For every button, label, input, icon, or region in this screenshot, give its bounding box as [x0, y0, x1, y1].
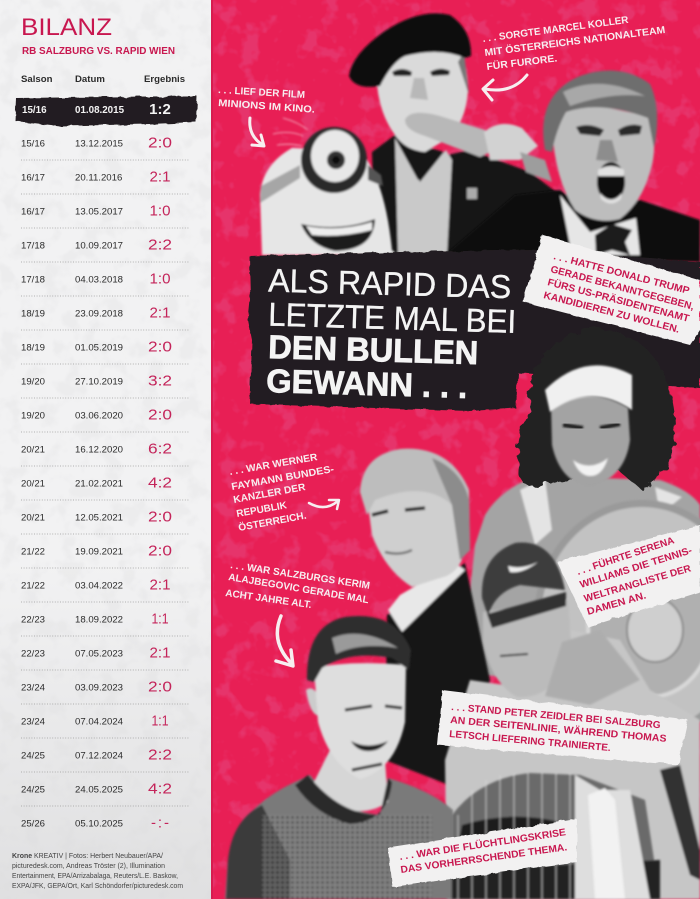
- table header: Datum: [75, 74, 105, 85]
- photo credits: picturedesk.com, Andreas Tröster (2), Illumination: [12, 863, 165, 870]
- table rows: 1:1: [152, 712, 168, 730]
- text: Faymann: REPUBLIK: [236, 500, 288, 520]
- table header: Ergebnis: [144, 74, 185, 85]
- callout: Zeidler: LETSCH LIEFERING TRAINIERTE.: [449, 729, 611, 754]
- table rows: 21.02.2021: [75, 478, 123, 490]
- table rows: 18.09.2022: [75, 614, 123, 626]
- text: Faymann: . . . WAR WERNER: [229, 452, 319, 478]
- callout: Trump: KANDIDIEREN ZU WOLLEN.: [542, 290, 681, 336]
- table rows: 16/17: [21, 206, 45, 218]
- text: Alajbegovic: ALAJBEGOVIC GERADE MAL: [228, 572, 369, 606]
- photo credits: [12, 853, 183, 890]
- table rows: 4:2: [148, 780, 172, 798]
- title: LETZTE MAL BEI: [268, 296, 517, 340]
- table rows: 2:1: [150, 304, 170, 322]
- table rows: 20/21: [21, 444, 45, 456]
- title: GEWANN . . .: [266, 362, 468, 405]
- table rows: 20/21: [21, 478, 45, 490]
- table rows: 2:0: [148, 542, 172, 560]
- text: Minions: MINIONS IM KINO.: [218, 98, 316, 116]
- table rows: 03.09.2023: [75, 682, 123, 694]
- dark band behind title: [248, 250, 700, 411]
- table rows: 19.09.2021: [75, 546, 123, 558]
- table rows: 1:0: [150, 270, 170, 288]
- table rows: 1:1: [152, 610, 168, 628]
- subheading: RB SALZBURG VS. RAPID WIEN: [22, 46, 175, 57]
- callout: Trump: [523, 235, 700, 345]
- table rows: 2:0: [148, 134, 172, 152]
- background: pink: [212, 0, 700, 899]
- table rows: 18/19: [21, 342, 45, 354]
- table rows: 17/18: [21, 274, 45, 286]
- table rows: 27.10.2019: [75, 376, 123, 388]
- highlighted row: [15, 96, 197, 126]
- callout: Zeidler: . . . STAND PETER ZEIDLER BEI SALZBURG: [451, 702, 661, 731]
- table rows: 24/25: [21, 784, 45, 796]
- table rows: 21/22: [21, 546, 45, 558]
- table rows: 20/21: [21, 512, 45, 524]
- table rows: 2:0: [148, 678, 172, 696]
- panel: bilanz table: [0, 0, 213, 899]
- table rows: 19/20: [21, 376, 45, 388]
- table rows: 1:0: [150, 202, 170, 220]
- table rows: 24.05.2025: [75, 784, 123, 796]
- callout: Serena: . . . FÜHRTE SERENA: [575, 533, 676, 578]
- table rows: 22/23: [21, 614, 45, 626]
- callout: Serena: DAMEN AN.: [586, 590, 648, 618]
- text: Faymann: KANZLER DER: [233, 482, 307, 506]
- text: Alajbegovic: [225, 560, 371, 611]
- callout: Zeidler: AN DER SEITENLINIE, WÄHREND THOMAS: [450, 713, 667, 745]
- table rows: 2:0: [148, 338, 172, 356]
- text: Faymann: [229, 452, 335, 534]
- photo: Werner Faymann: [360, 449, 490, 790]
- callout: Serena: [557, 525, 700, 627]
- table rows: 04.03.2018: [75, 274, 123, 286]
- table rows: 01.05.2019: [75, 342, 123, 354]
- table rows: 23/24: [21, 682, 46, 694]
- photo: Donald Trump: [445, 71, 700, 262]
- table rows: 2:1: [150, 168, 170, 186]
- table rows: 23/24: [21, 716, 46, 728]
- table rows: 23.09.2018: [75, 308, 123, 320]
- title: ALS RAPID DAS: [268, 262, 512, 305]
- text: Minions: . . . LIEF DER FILM: [218, 85, 305, 101]
- table rows: 03.04.2022: [75, 580, 123, 592]
- photo credits: Krone KREATIV | Fotos: Herbert Neubauer/APA/: [12, 853, 163, 860]
- table rows: 12.05.2021: [75, 512, 123, 524]
- photo credits: Entertainment, EPA/Arrizabalaga, Reuters/L.E. Baskow,: [12, 873, 178, 880]
- callout: Serena: WILLIAMS DIE TENNIS-: [579, 545, 694, 591]
- table rows: 19/20: [21, 410, 45, 422]
- table rows: 07.05.2023: [75, 648, 123, 660]
- table header: Salson: [21, 74, 53, 85]
- arrow: Koller: [483, 75, 527, 100]
- photo: Minion: [260, 118, 398, 255]
- photo: Peter Zeidler: [445, 543, 700, 899]
- text: Faymann: FAYMANN BUNDES-: [231, 464, 335, 493]
- table rows: 16.12.2020: [75, 444, 123, 456]
- text: Faymann: ÖSTERREICH.: [237, 509, 308, 534]
- photo: Marcel Koller: [349, 13, 565, 255]
- table rows: 3:2: [148, 372, 172, 390]
- photo: Kerim Alajbegovic: [225, 616, 453, 899]
- text: Alajbegovic: . . . WAR SALZBURGS KERIM: [230, 560, 371, 592]
- title: [266, 262, 517, 405]
- callout: Serena: WELTRANGLISTE DER: [583, 563, 693, 605]
- callout: Flüchtlingskrise: DAS VORHERRSCHENDE THEMA.: [400, 842, 568, 876]
- table rows: 07.12.2024: [75, 750, 124, 762]
- arrow: Alajbegovic: [276, 616, 293, 666]
- table rows: 17/18: [21, 240, 45, 252]
- text: Koller: [482, 15, 666, 73]
- text: Minions: [218, 85, 316, 116]
- table rows: 2:2: [148, 746, 172, 764]
- table rows: -:-: [151, 814, 169, 832]
- table rows: 18/19: [21, 308, 45, 320]
- callout: Zeidler: [437, 690, 688, 765]
- title: DEN BULLEN: [268, 328, 479, 371]
- table rows: 2:0: [148, 508, 172, 526]
- table rows: 21/22: [21, 580, 45, 592]
- text: Koller: MIT ÖSTERREICHS NATIONALTEAM: [484, 23, 666, 59]
- arrow: Minion: [250, 118, 264, 146]
- callout: Trump: FÜRS US-PRÄSIDENTENAMT: [546, 275, 691, 325]
- table rows: 03.06.2020: [75, 410, 123, 422]
- arrow: Faymann: [309, 500, 339, 509]
- table rows: 2:1: [150, 576, 170, 594]
- table rows: 20.11.2016: [75, 172, 122, 184]
- callout: Trump: GERADE BEKANNTGEGEBEN,: [549, 264, 695, 313]
- table rows: 2:0: [148, 406, 172, 424]
- table rows: 4:2: [148, 474, 172, 492]
- photo: Serena Williams: [452, 328, 700, 680]
- text: Koller: . . . SORGTE MARCEL KOLLER: [482, 15, 630, 45]
- text: Alajbegovic: ACHT JAHRE ALT.: [225, 588, 312, 611]
- table rows: 25/26: [21, 818, 45, 830]
- table rows: 16/17: [21, 172, 45, 184]
- table rows: 13.12.2015: [75, 138, 123, 150]
- table rows: 07.04.2024: [75, 716, 124, 728]
- callout: Trump: . . . HATTE DONALD TRUMP: [552, 251, 691, 297]
- table rows: 10.09.2017: [75, 240, 123, 252]
- highlighted row: 15/16: [22, 105, 47, 116]
- highlighted row: 1:2: [149, 101, 171, 118]
- table rows: 22/23: [21, 648, 45, 660]
- highlighted row: 01.08.2015: [75, 105, 125, 116]
- text: Koller: FÜR FURORE.: [486, 51, 558, 73]
- callout: Flüchtlingskrise: [388, 819, 577, 887]
- table rows: 6:2: [148, 440, 172, 458]
- table header: [21, 74, 185, 85]
- table rows: 15/16: [21, 138, 45, 150]
- table rows: 2:2: [148, 236, 172, 254]
- heading: Bilanz: BILANZ: [21, 14, 112, 41]
- table rows: 05.10.2025: [75, 818, 123, 830]
- table rows: [21, 134, 189, 832]
- table rows: 13.05.2017: [75, 206, 123, 218]
- photo: refugee crisis fence: [452, 773, 660, 899]
- table rows: 2:1: [150, 644, 170, 662]
- photo credits: EXPA/JFK, GEPA/Ort, Karl Schöndorfer/picturedesk.com: [12, 883, 183, 890]
- photo: Wimbledon plate: [534, 500, 700, 740]
- callout: Flüchtlingskrise: . . . WAR DIE FLÜCHTLINGSKRISE: [399, 825, 567, 863]
- table rows: 24/25: [21, 750, 45, 762]
